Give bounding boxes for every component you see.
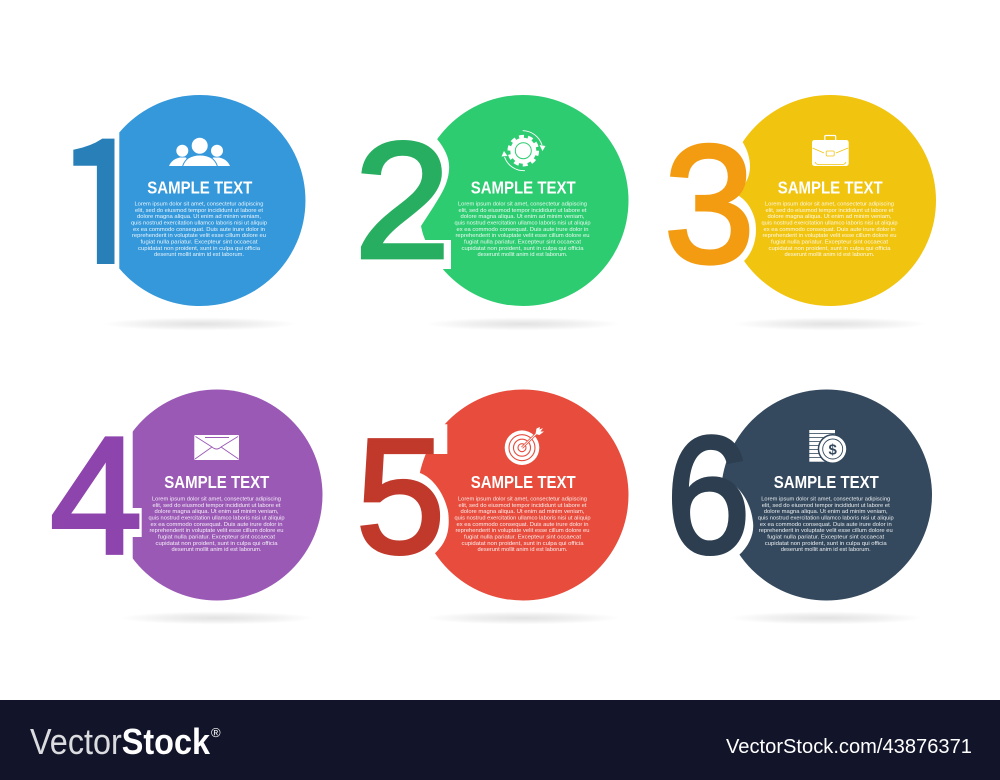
icon: gear with arrows <box>502 131 546 171</box>
shadow 1 <box>103 318 297 330</box>
shadow 6 <box>729 612 923 624</box>
circle 5 <box>400 390 628 600</box>
body text 5: Lorem ipsum dolor sit amet, consectetur adipiscing <box>458 496 587 502</box>
body text 4: dolore magna aliqua. Ut enim ad minim veniam, <box>154 509 279 515</box>
circle 4 <box>100 390 322 600</box>
circle 2 <box>400 95 628 306</box>
body text 1 <box>131 202 267 258</box>
panel 3: yellow step <box>664 95 936 330</box>
logo wordmark: VectorStock <box>30 721 211 762</box>
shadow 5 <box>426 612 620 624</box>
body text 2: cupidatat non proident, sunt in culpa qui officia <box>462 246 584 252</box>
panel 1: blue step <box>73 95 306 329</box>
body text 1: deserunt mollit anim id est laborum. <box>154 252 244 258</box>
heading 4: SAMPLE TEXT <box>164 472 270 492</box>
icon: envelope <box>194 435 239 460</box>
body text 4: cupidatat non proident, sunt in culpa qui officia <box>156 541 278 547</box>
body text 2: fugiat nulla pariatur. Excepteur sint occaecat <box>464 240 581 246</box>
circle 1 <box>119 95 305 306</box>
body text 2: reprehenderit in voluptate velit esse cillum dolore eu <box>456 233 590 239</box>
panel 2: green step <box>354 95 628 330</box>
body text 2: ex ea commodo consequat. Duis aute irure dolor in <box>456 227 588 233</box>
body text 6: elit, sed do eiusmod tempor incididunt ut labore et <box>762 503 890 509</box>
body text 3: ex ea commodo consequat. Duis aute irure dolor in <box>764 227 896 233</box>
shadow 4 <box>120 612 314 624</box>
body text 5: elit, sed do eiusmod tempor incididunt ut labore et <box>458 503 587 509</box>
heading 5: SAMPLE TEXT <box>471 472 576 492</box>
image id: VectorStock.com/43876371 <box>726 736 972 758</box>
icon: briefcase <box>812 136 849 166</box>
body text 5: deserunt mollit anim id est laborum. <box>478 547 568 553</box>
body text 1: dolore magna aliqua. Ut enim ad minim veniam, <box>137 214 261 220</box>
body text 4: elit, sed do eiusmod tempor incididunt ut labore et <box>152 503 281 509</box>
body text 5: dolore magna aliqua. Ut enim ad minim veniam, <box>460 509 585 515</box>
body text 2 <box>454 202 590 258</box>
body text 6: ex ea commodo consequat. Duis aute irure dolor in <box>760 522 892 528</box>
body text 4: fugiat nulla pariatur. Excepteur sint occaecat <box>158 534 275 540</box>
panel 6: navy step <box>666 390 932 624</box>
numeral 3: 3 <box>664 111 755 299</box>
body text 2: quis nostrud exercitation ullamco laboris nisi ut aliquip <box>454 220 590 226</box>
body text 1: quis nostrud exercitation ullamco laboris nisi ut aliquip <box>131 220 267 226</box>
body text 6 <box>758 496 894 553</box>
body text 3: reprehenderit in voluptate velit esse cillum dolore eu <box>762 233 896 239</box>
body text 5: quis nostrud exercitation ullamco laboris nisi ut aliquip <box>454 516 590 522</box>
body text 3: cupidatat non proident, sunt in culpa qui officia <box>768 246 891 252</box>
body text 2: elit, sed do eiusmod tempor incididunt ut labore et <box>458 208 587 214</box>
heading 3: SAMPLE TEXT <box>778 178 883 198</box>
body text 4: deserunt mollit anim id est laborum. <box>172 547 262 553</box>
body text 6: reprehenderit in voluptate velit esse cillum dolore eu <box>759 528 893 534</box>
body text 5: cupidatat non proident, sunt in culpa qui officia <box>462 541 584 547</box>
icon: target with arrow <box>505 427 544 465</box>
shadow 2 <box>426 318 620 330</box>
circle 3 <box>700 95 936 306</box>
body text 5: reprehenderit in voluptate velit esse cillum dolore eu <box>456 528 590 534</box>
body text 4: ex ea commodo consequat. Duis aute irure dolor in <box>150 522 282 528</box>
body text 1: cupidatat non proident, sunt in culpa qui officia <box>138 246 261 252</box>
numeral 1: 1 <box>54 52 153 344</box>
panel 5: red step <box>356 390 628 624</box>
body text 6: quis nostrud exercitation ullamco laboris nisi ut aliquip <box>758 516 894 522</box>
footer bar <box>0 700 1000 780</box>
icon: coin stack <box>809 430 848 464</box>
body text 4 <box>148 496 284 553</box>
registered mark: ® <box>211 725 221 740</box>
body text 3 <box>762 202 898 258</box>
body text 3: elit, sed do eiusmod tempor incididunt ut labore et <box>766 208 894 214</box>
body text 3: deserunt mollit anim id est laborum. <box>784 252 875 258</box>
body text 1: fugiat nulla pariatur. Excepteur sint occaecat <box>140 240 258 246</box>
heading 2: SAMPLE TEXT <box>471 178 576 198</box>
shadow 3 <box>733 318 927 330</box>
body text 3: fugiat nulla pariatur. Excepteur sint occaecat <box>771 240 888 246</box>
body text 2: deserunt mollit anim id est laborum. <box>478 252 568 258</box>
body text 3: dolore magna aliqua. Ut enim ad minim veniam, <box>768 214 892 220</box>
body text 1: Lorem ipsum dolor sit amet, consectetur adipiscing <box>134 202 264 208</box>
circle 6 <box>700 390 932 600</box>
body text 5: ex ea commodo consequat. Duis aute irure dolor in <box>456 522 588 528</box>
body text 2: Lorem ipsum dolor sit amet, consectetur adipiscing <box>458 202 587 208</box>
heading 6: SAMPLE TEXT <box>774 472 879 492</box>
numeral 4: 4 <box>50 403 142 589</box>
body text 6: fugiat nulla pariatur. Excepteur sint occaecat <box>767 534 885 540</box>
body text 4: Lorem ipsum dolor sit amet, consectetur adipiscing <box>152 496 281 502</box>
body text 4: reprehenderit in voluptate velit esse cillum dolore eu <box>150 528 284 534</box>
body text 6: deserunt mollit anim id est laborum. <box>781 547 871 553</box>
body text 3: Lorem ipsum dolor sit amet, consectetur adipiscing <box>765 202 894 208</box>
body text 1: elit, sed do eiusmod tempor incididunt ut labore et <box>135 208 263 214</box>
heading 1: SAMPLE TEXT <box>147 178 253 198</box>
body text 5 <box>454 496 590 553</box>
numeral 6: 6 <box>666 402 751 588</box>
numeral 2: 2 <box>354 108 450 293</box>
body text 2: dolore magna aliqua. Ut enim ad minim veniam, <box>460 214 585 220</box>
icon: people <box>169 138 230 166</box>
body text 6: cupidatat non proident, sunt in culpa qui officia <box>765 541 888 547</box>
body text 4: quis nostrud exercitation ullamco laboris nisi ut aliquip <box>148 516 284 522</box>
body text 1: ex ea commodo consequat. Duis aute irure dolor in <box>133 227 265 233</box>
icon: coin stack: $ <box>829 442 838 458</box>
body text 3: quis nostrud exercitation ullamco laboris nisi ut aliquip <box>762 220 898 226</box>
body text 6: dolore magna aliqua. Ut enim ad minim veniam, <box>764 509 888 515</box>
numeral 5: 5 <box>356 406 445 588</box>
body text 1: reprehenderit in voluptate velit esse cillum dolore eu <box>132 233 266 239</box>
body text 5: fugiat nulla pariatur. Excepteur sint occaecat <box>464 534 581 540</box>
panel 4: purple step <box>50 390 322 624</box>
body text 6: Lorem ipsum dolor sit amet, consectetur adipiscing <box>761 496 890 502</box>
